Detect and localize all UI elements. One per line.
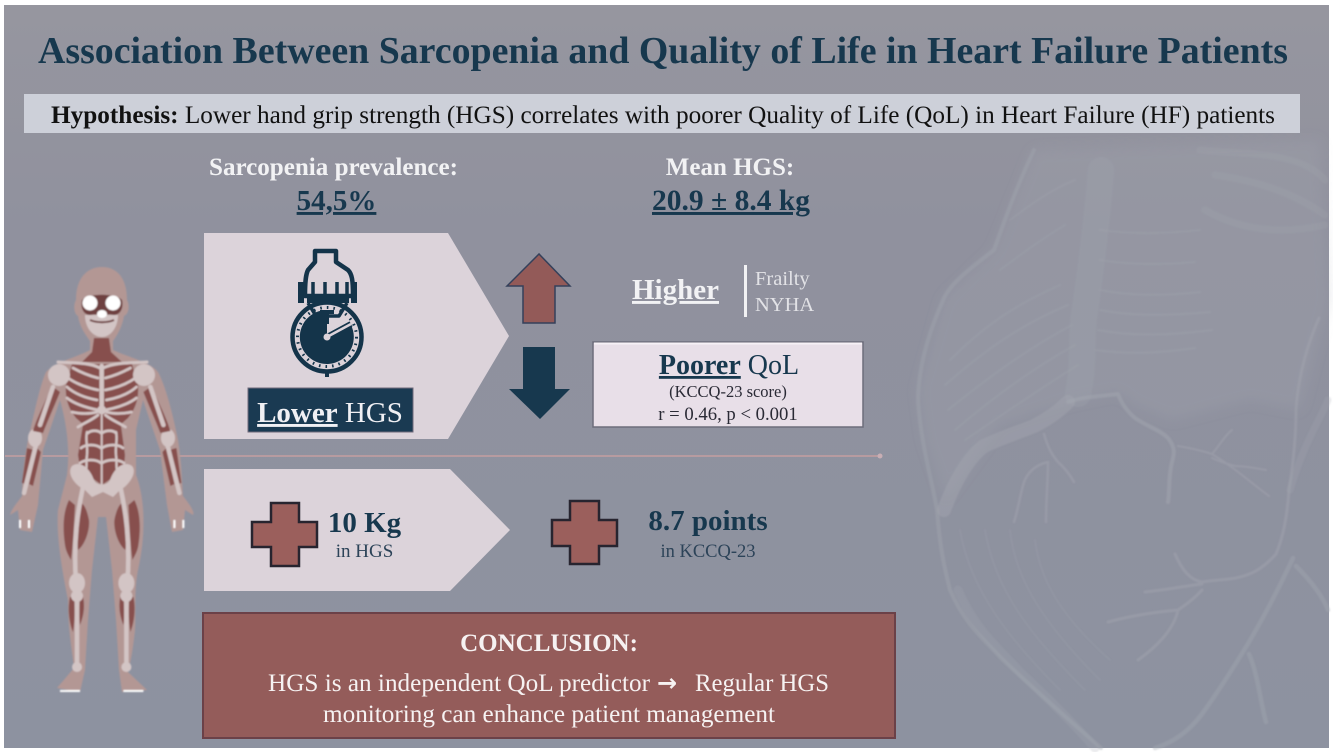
sternum, clavicles and abdominal divisions	[58, 362, 147, 486]
panel: conclusion: HGS is an independent QoL predictor	[268, 670, 651, 697]
callout: poorer QoL	[593, 342, 863, 427]
higher frailty and NYHA: NYHA	[755, 294, 814, 316]
label: lower HGS	[248, 388, 413, 432]
rib bones right	[105, 368, 136, 427]
shoulder joints	[28, 364, 175, 447]
stat: mean HGS: 20.9 ± 8.4 kg	[652, 185, 810, 217]
text: 10 Kg in HGS	[328, 507, 402, 562]
panel: conclusion: CONCLUSION:	[460, 630, 638, 657]
arrow: down	[509, 347, 570, 419]
rib bones left	[67, 368, 98, 427]
panel: conclusion: →	[657, 669, 677, 697]
label: lower HGS: Lower HGS	[257, 397, 403, 429]
icon: plus in HGS	[252, 503, 317, 566]
background heart illustration	[918, 140, 1329, 748]
icon: hand grip dynamometer	[292, 251, 362, 377]
panel: 10 Kg pentagon	[204, 469, 510, 591]
icon: human body with muscles and skeleton	[10, 267, 193, 692]
panel: lower HGS pentagon	[204, 233, 509, 439]
icon: plus in KCCQ-23	[552, 501, 617, 564]
abdomen muscles	[78, 418, 125, 485]
panel: conclusion: monitoring can enhance patient management	[323, 701, 775, 728]
text: 10 Kg in HGS: 10 Kg	[328, 507, 402, 539]
body silhouette	[10, 267, 193, 692]
text: 10 Kg in HGS: in HGS	[336, 541, 393, 562]
stat: sarcopenia prevalence	[209, 154, 458, 217]
stat: sarcopenia prevalence: 54,5%	[297, 185, 376, 217]
stat: mean HGS	[652, 154, 810, 217]
stat: mean HGS: Mean HGS:	[666, 154, 794, 181]
callout: poorer QoL: Poorer QoL	[659, 350, 799, 381]
higher frailty and NYHA: Higher	[632, 274, 719, 306]
higher frailty and NYHA: Frailty	[755, 268, 810, 290]
title: Association Between Sarcopenia and Quality of Life in Heart Failure Patients	[38, 31, 1288, 72]
text: 8.7 points in KCCQ-23	[648, 505, 768, 562]
left limb muscles and bones	[20, 386, 89, 691]
pelvis	[70, 464, 134, 497]
callout: poorer QoL: (KCCQ-23 score)	[669, 382, 787, 401]
right limb muscles and bones	[114, 386, 183, 691]
panel: conclusion	[203, 613, 895, 738]
arrow: up	[507, 254, 570, 323]
text: 8.7 points in KCCQ-23: in KCCQ-23	[660, 542, 756, 562]
panel: conclusion: Regular HGS	[695, 670, 829, 697]
lower face	[85, 315, 118, 337]
torso ribcage muscles	[66, 364, 138, 425]
stat: sarcopenia prevalence: Sarcopenia prevalence:	[209, 154, 458, 181]
hypothesis bar	[24, 94, 1300, 133]
face mask	[81, 295, 123, 315]
callout: poorer QoL: r = 0.46, p < 0.001	[658, 404, 798, 425]
teeth	[90, 320, 114, 322]
divider line	[5, 454, 882, 458]
eyes and nose	[82, 296, 120, 318]
text: 8.7 points in KCCQ-23: 8.7 points	[648, 505, 768, 537]
neck muscles	[82, 338, 122, 362]
higher frailty and NYHA	[632, 265, 814, 317]
hypothesis bar: Hypothesis: Lower hand grip strength (HGS) correlates with poorer Quality of Life (QoL) in Heart Failure (HF) patients	[51, 102, 1275, 129]
